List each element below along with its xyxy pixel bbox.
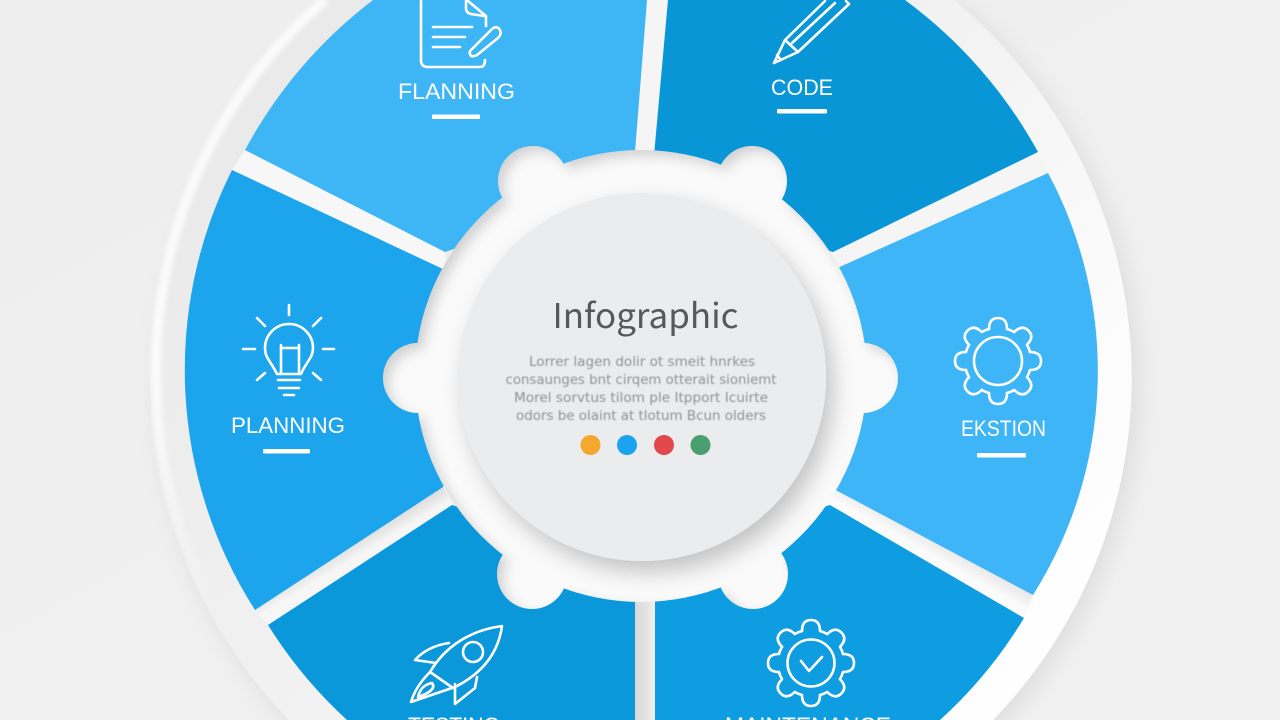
body text: consaunges bnt cirqem otterait sioniemt <box>506 373 776 388</box>
gap: upper right <box>833 152 1048 270</box>
ring highlight: upper left band <box>156 0 325 380</box>
segment: bottom left <box>268 505 635 720</box>
gap: bottom <box>635 590 655 720</box>
segment: left <box>185 170 480 610</box>
underline: flanning <box>432 114 480 119</box>
gap: lower right <box>830 487 1033 618</box>
body text: Lorrer lagen dolir ot smeit hnrkes <box>529 355 755 370</box>
segment: right <box>800 173 1098 595</box>
label: code: CODE <box>771 75 833 100</box>
icon: pencil <box>774 1 849 63</box>
label: planning: PLANNING <box>231 413 345 438</box>
gap: top <box>634 0 668 160</box>
label: flanning: FLANNING <box>398 79 515 104</box>
colored dots <box>580 435 710 455</box>
panel: wheel segments <box>185 0 1098 720</box>
segment: top left <box>245 0 647 252</box>
icon: gear with check <box>768 620 854 706</box>
segment: top right <box>650 0 1038 252</box>
icon: rocket <box>411 626 502 704</box>
underline: planning <box>263 449 310 454</box>
gap: upper left <box>232 150 445 270</box>
segment: bottom right <box>655 505 1024 720</box>
icon: document with pen <box>421 1 501 67</box>
icon: light bulb <box>243 305 334 395</box>
title: Infographic <box>552 289 738 338</box>
body text: odors be olaint at tlotum Bcun olders <box>516 409 766 424</box>
ring highlight: left band lower <box>156 380 215 610</box>
hub: white gear shape <box>383 146 898 609</box>
label: ekstion: EKSTION <box>961 416 1046 441</box>
central disc <box>458 193 826 561</box>
icon: gear <box>955 318 1041 404</box>
underline: code <box>777 109 827 114</box>
gap: lower left <box>255 487 452 625</box>
outer ring <box>150 0 1132 720</box>
body text: Morel sorvtus tilom ple Itpport Icuirte <box>514 391 768 406</box>
body text <box>506 355 776 424</box>
underline: ekstion <box>977 453 1026 458</box>
